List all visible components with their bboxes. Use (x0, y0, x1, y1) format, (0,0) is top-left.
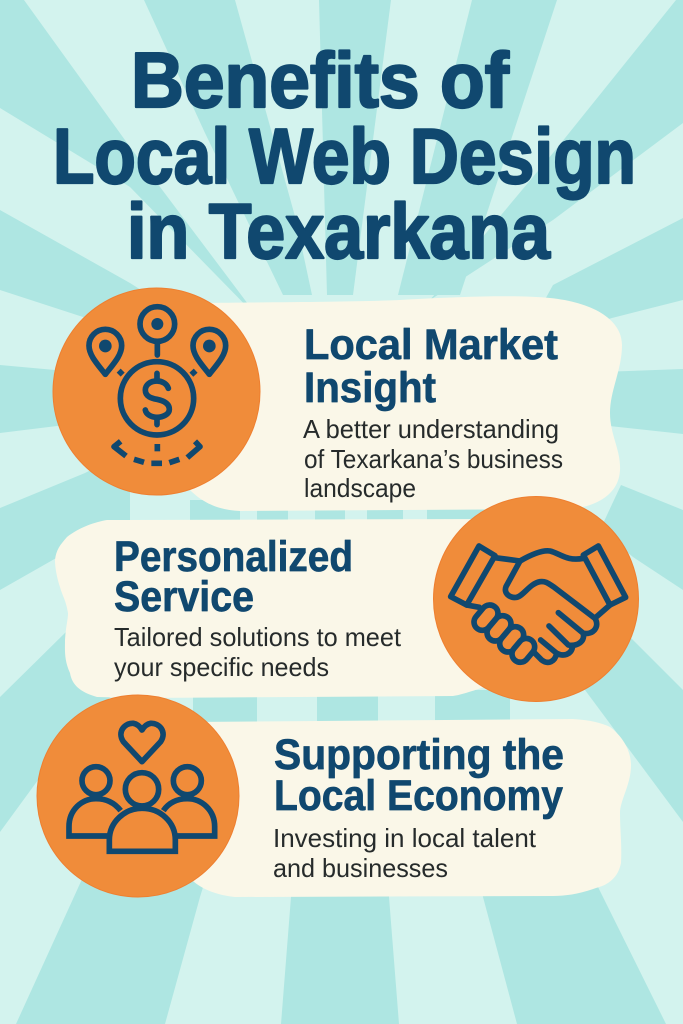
title: in Texarkana (127, 187, 551, 275)
icon: community with heart (37, 695, 239, 897)
card background (55, 519, 560, 698)
heading: Insight (304, 364, 436, 412)
heading: Supporting the (274, 731, 564, 779)
heading: Local Market (304, 321, 558, 369)
body text: your specific needs (114, 652, 329, 682)
icon: handshake (434, 496, 638, 702)
body text: landscape (304, 473, 416, 503)
body text: of Texarkana’s business (304, 444, 563, 474)
body text: A better understanding (303, 414, 559, 444)
title: Benefits of (131, 36, 510, 124)
card background (190, 296, 622, 511)
body text (273, 823, 537, 883)
body text: and businesses (273, 853, 448, 883)
heading: Service (114, 573, 254, 621)
body text (303, 414, 563, 503)
title (53, 36, 636, 275)
body text (114, 622, 402, 682)
heading (114, 533, 353, 621)
heading: Personalized (114, 533, 353, 581)
card background (190, 719, 631, 897)
body text: Investing in local talent (273, 823, 537, 853)
panel: supporting the local economy (190, 719, 631, 897)
icon: map pins and dollar coin (53, 288, 260, 495)
heading: Local Economy (274, 772, 563, 820)
panel: local market insight (190, 296, 622, 511)
panel: personalized service (55, 519, 560, 698)
heading (304, 321, 558, 412)
body text: Tailored solutions to meet (114, 622, 402, 652)
heading (274, 731, 564, 820)
